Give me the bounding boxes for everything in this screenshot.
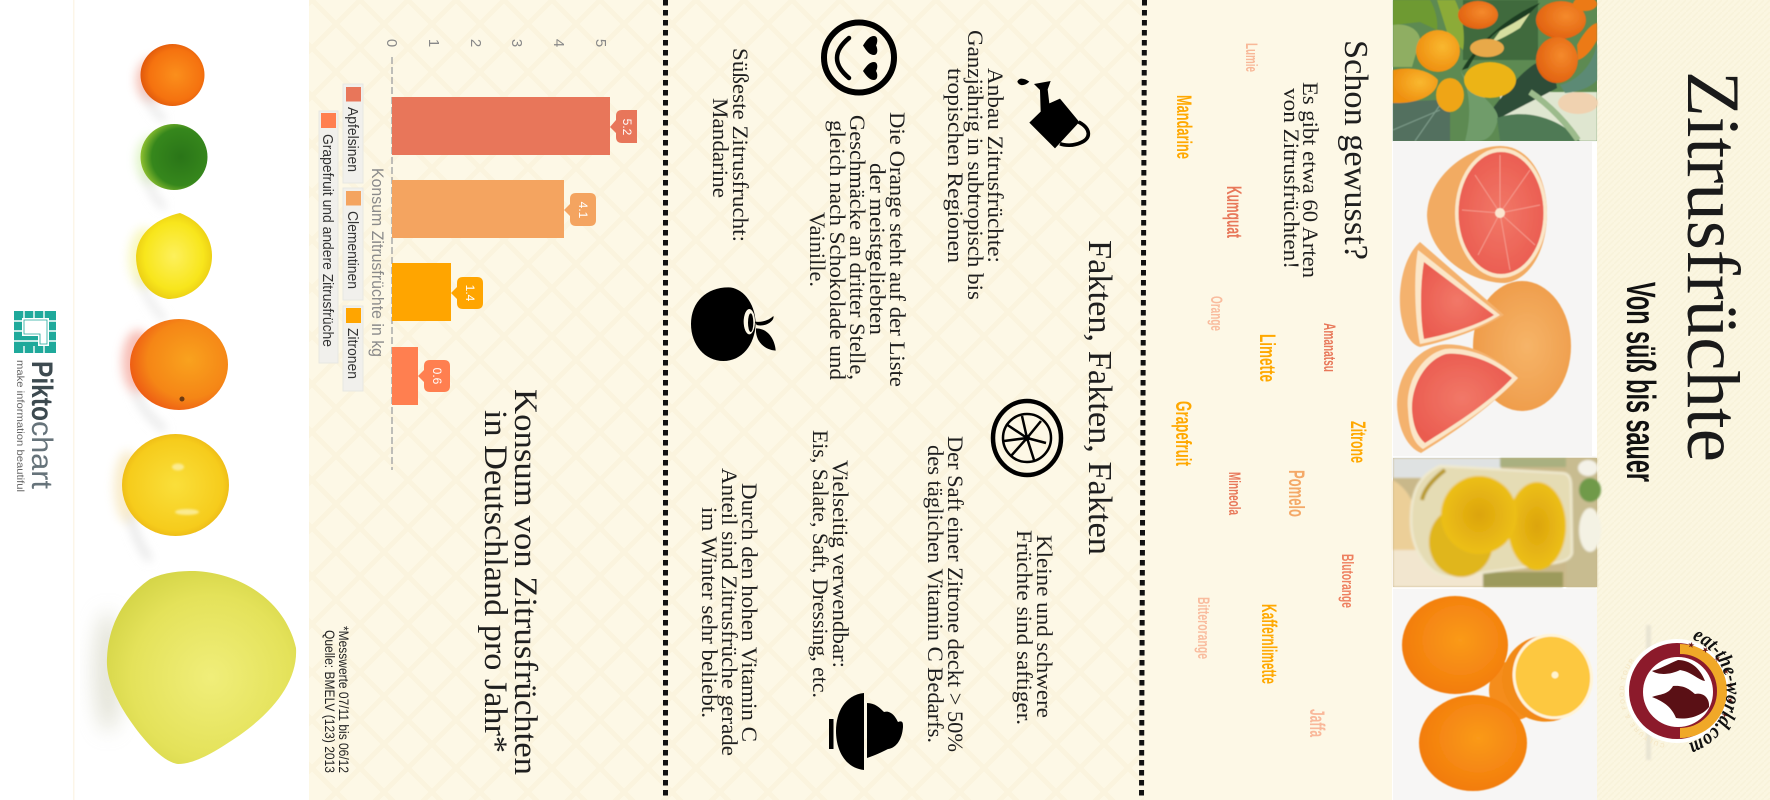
word cloud of citrus varieties: Pomelo (1284, 470, 1309, 517)
word cloud of citrus varieties: Kumquat (1222, 186, 1245, 238)
word cloud of citrus varieties (1171, 43, 1369, 737)
word cloud of citrus varieties: Mandarine (1172, 95, 1195, 159)
heading: Fakten, Fakten, Fakten: Fakten, Fakten, Fakten (1081, 240, 1118, 555)
fruit: yellow orange (114, 434, 229, 560)
legend item: Clementinen (343, 188, 363, 300)
text: sweetest citrus: Süßeste Zitrusfrucht: (728, 48, 753, 242)
word cloud of citrus varieties: Lumie (1242, 43, 1261, 72)
fruit: small orange (136, 44, 204, 120)
text: sweetest citrus: Mandarine (708, 98, 733, 198)
text: sweetest citrus (708, 48, 753, 242)
heading: chart title: Konsum von Zitrusfrüchten (507, 389, 543, 775)
text: lemon juice vitamin C (923, 436, 968, 752)
lower half (1397, 344, 1518, 453)
word cloud of citrus varieties: Blutorange (1338, 554, 1357, 608)
text: cultivation: Ganzjährig in subtropisch bis (963, 30, 988, 300)
axis tick labels: 4 (550, 39, 567, 47)
photo: grapefruit (1393, 141, 1592, 456)
text: versatile use (808, 430, 853, 698)
legend (319, 84, 363, 391)
axis tick labels: 3 (508, 39, 525, 47)
footnote and source: Quelle: BMELV (123) 2013 (322, 630, 337, 773)
legend item: Zitronen: Zitronen (344, 328, 360, 379)
legend item: Grapefruit und andere: Grapefruit und andere Zitrusfrüche (319, 134, 335, 347)
icon: apple silhouette (691, 287, 776, 361)
logo: eat-the-world (1620, 625, 1736, 760)
half grapefruit (1427, 146, 1547, 283)
text: orange flavour ranking: Geschmäcke an dritter Stelle, (845, 115, 870, 380)
photo: row of citrus fruits (94, 44, 296, 764)
bar: Apfelsinen 5.2: 5.2 (620, 119, 634, 136)
bar: Grapefruit 0.6 (392, 347, 450, 405)
subtitle: Von süß bis sauer (1618, 282, 1664, 482)
photo: kumquats on branch (1393, 0, 1598, 141)
word cloud of citrus varieties: Grapefruit (1171, 401, 1196, 466)
cream page background (309, 0, 1392, 800)
word cloud of citrus varieties: Limette (1255, 334, 1280, 382)
legend item: Zitronen (343, 306, 363, 391)
panel: facts (691, 22, 1118, 770)
wordmark: Pikto: Pikto (25, 361, 58, 421)
text: winter popularity: im Winter sehr beliebt. (697, 507, 722, 718)
tagline: make information beautiful (14, 360, 26, 492)
whole grapefruit (1473, 281, 1571, 411)
footnote and source (322, 626, 351, 773)
panel: consumption chart (319, 39, 637, 775)
text: versatile use: Eis, Salate, Saft, Dressing, etc. (808, 430, 833, 698)
photo: lemons in a glass jar (1393, 458, 1601, 587)
footnote and source: *Messwerte 07/11 bis 06/12 (336, 626, 351, 773)
heading: chart title (477, 389, 543, 775)
bar: Clementinen 4.1: 4.1 (576, 202, 590, 219)
logo ring text: CULTURE & FOOD TOUR (1620, 658, 1664, 748)
title: Zitrusfrüchte (1671, 71, 1754, 462)
text: orange flavour ranking: Vainille. (805, 212, 830, 287)
word cloud of citrus varieties: Orange (1207, 296, 1226, 331)
text: orange flavour ranking: gleich nach Schokolade und (825, 120, 850, 380)
axis tick labels: 0 (383, 39, 400, 47)
text: species count line 1: Es gibt etwa 60 Arten (1298, 82, 1323, 278)
icon: citrus slice (993, 401, 1061, 475)
bar: Apfelsinen 5.2 (392, 97, 637, 155)
logo wordmark: eat-the-world.com (1689, 632, 1736, 752)
wedge (1400, 242, 1504, 347)
white fruit panel background (0, 0, 309, 800)
text: winter popularity: Anteil sind Zitrusfrüche gerade (717, 468, 742, 756)
fruit: pomelo (94, 571, 296, 764)
icon: world map (1652, 660, 1709, 719)
text: winter popularity (697, 468, 762, 756)
icon: bowl of ice cream (829, 693, 903, 770)
axis title: Konsum Zitrusfrüchte in kg (368, 168, 386, 357)
text: small heavy fruits: Früchte sind saftiger. (1012, 530, 1037, 725)
word cloud of citrus varieties: Amanatsu (1320, 323, 1339, 372)
fruit: lemon (129, 213, 212, 320)
text: orange flavour ranking: der meistgeliebten (865, 163, 890, 335)
text: small heavy fruits: Kleine und schwere (1032, 535, 1057, 718)
word cloud of citrus varieties: Jaffa (1305, 709, 1328, 737)
bar chart (368, 39, 637, 470)
text: winter popularity: Durch den hohen Vitamin C (737, 483, 762, 742)
legend item: Clementinen: Clementinen (344, 211, 360, 289)
panel: did you know (1171, 40, 1374, 737)
icon: smiley with heart eyes (824, 22, 894, 92)
heading: Schon gewusst?: Schon gewusst? (1337, 40, 1374, 260)
axis tick labels: 5 (592, 39, 609, 47)
text: cultivation: tropischen Regionen (943, 68, 968, 263)
axis tick labels: 2 (467, 39, 484, 47)
bar: Zitronen 1.4: 1.4 (463, 285, 477, 302)
text: species count line 2: von Zitrusfrüchten! (1279, 88, 1304, 269)
axis tick labels (383, 39, 609, 47)
legend item: Apfelsinen: Apfelsinen (344, 107, 360, 172)
text: versatile use: Vielseitig verwendbar: (828, 460, 853, 668)
text: cultivation: Anbau Zitrusfrüchte: (983, 68, 1008, 263)
wordmark: chart: chart (25, 421, 58, 490)
text: small heavy fruits (1012, 530, 1057, 725)
logo stars: ★★★★★★★ (1688, 642, 1733, 718)
Piktochart logo (14, 311, 58, 492)
word cloud of citrus varieties: Bitterorange (1194, 597, 1213, 659)
icon: piktochart tile mark (14, 311, 56, 353)
text: cultivation (943, 30, 1008, 300)
axis tick labels: 1 (425, 39, 442, 47)
bar: Grapefruit 0.6: 0.6 (430, 368, 444, 385)
text: orange flavour ranking: Die Orange steht auf der Liste (885, 112, 910, 387)
bar: Clementinen 4.1 (392, 180, 596, 238)
title strip background (1597, 0, 1770, 800)
word cloud of citrus varieties: Zitrone (1346, 421, 1369, 463)
word cloud of citrus varieties: Kaffernlimette (1257, 604, 1280, 684)
icon: watering can (1017, 79, 1088, 148)
bar: Zitronen 1.4 (392, 263, 483, 321)
heading: chart title: in Deutschland pro Jahr* (477, 410, 513, 753)
word cloud of citrus varieties: Minneola (1225, 472, 1244, 515)
text: orange flavour ranking (805, 112, 910, 387)
legend item: Apfelsinen (343, 84, 363, 183)
fruit: orange (122, 319, 228, 430)
photo: oranges (1393, 589, 1604, 800)
text: lemon juice vitamin C: Der Saft einer Zitrone deckt > 50% (943, 436, 968, 752)
fruit: lime (136, 124, 208, 208)
text: lemon juice vitamin C: des täglichen Vitamin C Bedarfs. (923, 445, 948, 743)
